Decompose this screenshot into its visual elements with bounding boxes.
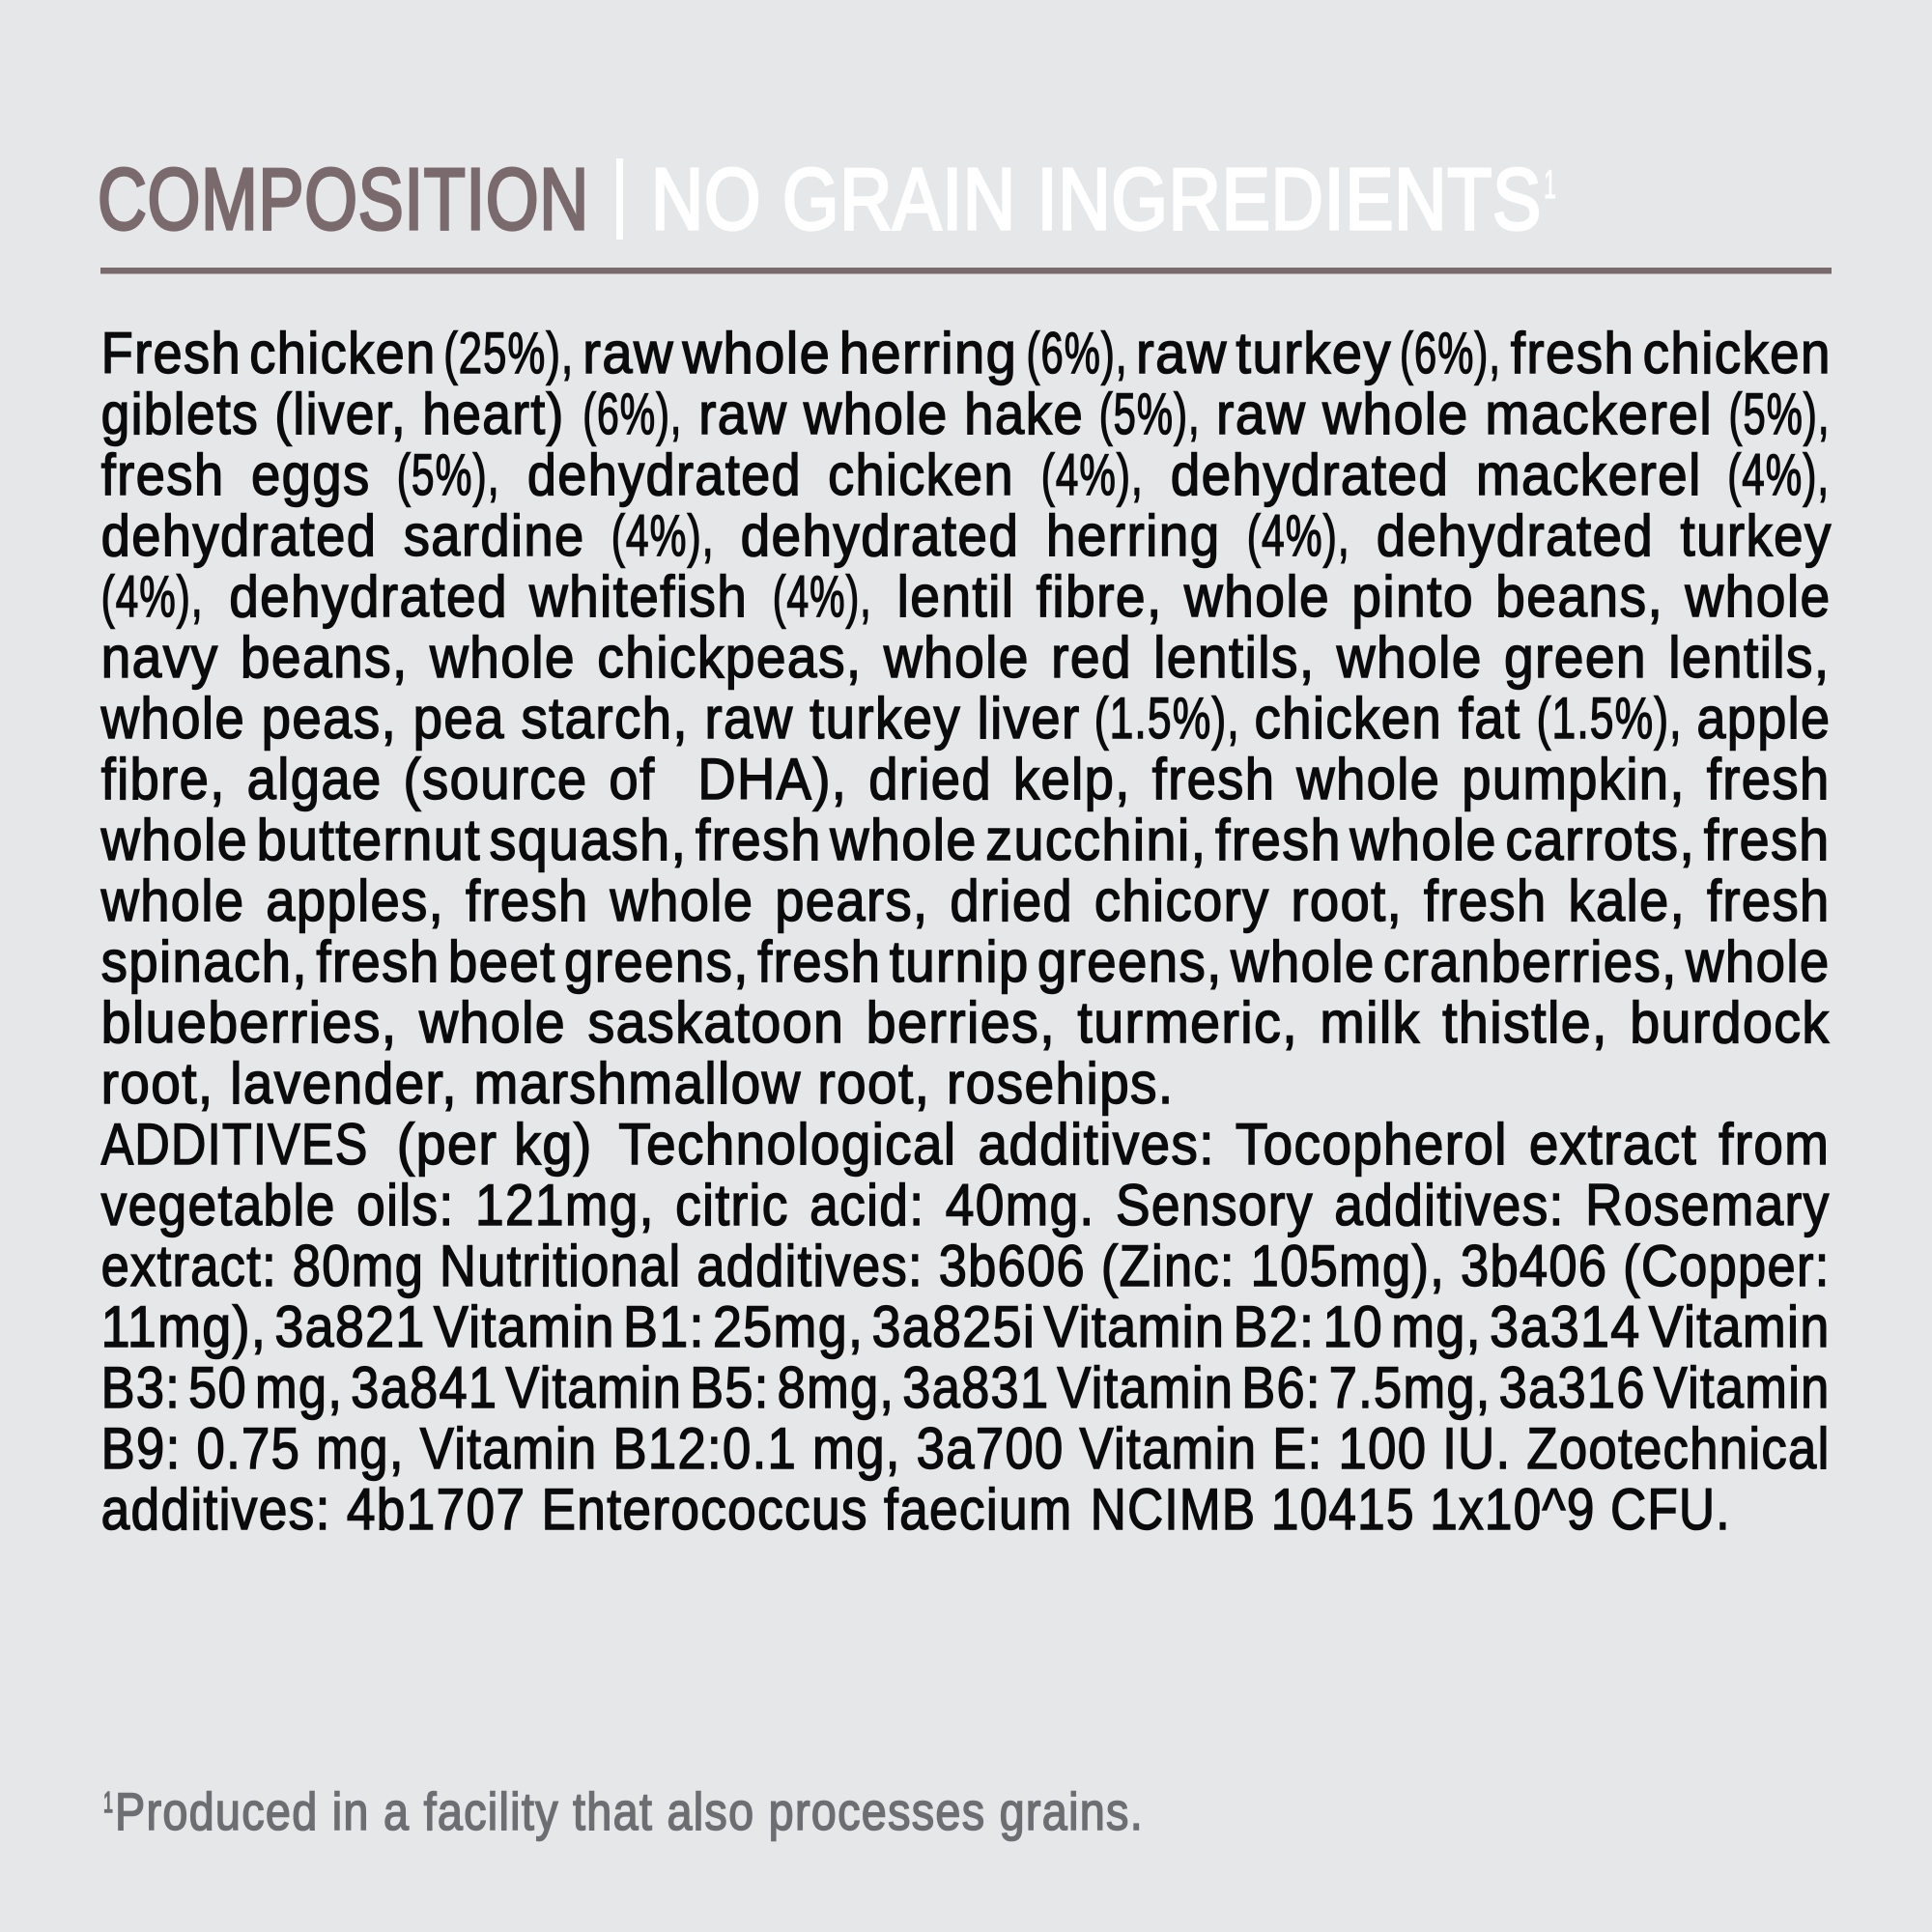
text block: ingredients list: dehydrated turkey [1377, 503, 1833, 568]
text block: ingredients list: raw whole herring [582, 321, 1017, 385]
text block: ingredients list: root, lavender, marshmallow root, rosehips. [101, 1051, 1175, 1116]
text block: ingredients list: dehydrated herring [741, 503, 1221, 568]
text block: additives list [101, 1112, 1831, 1542]
text block: ingredients list: (4%), [101, 564, 204, 629]
text block: ingredients list: (6%), [1026, 321, 1128, 385]
text block: ingredients list: whole butternut squash, fresh whole zucchini, fresh whole carrots, fresh [100, 808, 1831, 872]
footnote: Produced in a facility that also processes grains. [115, 1781, 1144, 1841]
heading divider [616, 158, 623, 240]
text block: ingredients list: (4%), [1041, 442, 1144, 507]
text block: ingredients list: (4%), [773, 564, 872, 629]
text block: ingredients list: (6%), [582, 382, 682, 446]
title: composition heading [98, 152, 1556, 248]
text block: ingredients list: chicken fat [1254, 686, 1520, 751]
text block: additives list: NCIMB 10415 1x10^9 CFU. [1091, 1477, 1731, 1542]
text block: additives list: (per kg) [397, 1112, 593, 1177]
text block: ingredients list [100, 321, 1833, 1116]
text block: ingredients list: lentil fibre, whole pinto beans, whole [897, 564, 1832, 629]
text block: ingredients list: dehydrated sardine [101, 503, 585, 568]
heading rule [100, 268, 1832, 274]
text block: ingredients list: (25%), [443, 321, 574, 385]
text block: ingredients list: fresh chicken [1511, 321, 1832, 385]
text block: additives list: additives: 4b1707 Enterococcus faecium [101, 1477, 1073, 1542]
text block: ingredients list: whole peas, pea starch, raw turkey liver [100, 686, 1081, 751]
text block: ingredients list: (1.5%), [1094, 686, 1240, 751]
heading: COMPOSITION: COMPOSITION [98, 152, 589, 248]
text block: ingredients list: (5%), [1729, 382, 1830, 446]
text block: ingredients list: navy beans, whole chickpeas, whole red lentils, whole green lentils, [101, 625, 1831, 690]
text block: ingredients list: (5%), [1099, 382, 1201, 446]
text block: ingredients list: (1.5%), [1537, 686, 1683, 751]
text block: ingredients list: dehydrated mackerel [1171, 442, 1702, 507]
heading: no grain ingredients: NO GRAIN INGREDIENTS [651, 152, 1542, 248]
text block: ingredients list: giblets (liver, heart) [101, 382, 565, 446]
text block: ingredients list: fresh eggs [101, 442, 371, 507]
text block: ingredients list: blueberries, whole saskatoon berries, turmeric, milk thistle, burdock [101, 990, 1831, 1055]
text block: ingredients list: dehydrated whitefish [229, 564, 748, 629]
text block: ingredients list: (6%), [1400, 321, 1501, 385]
text block: ingredients list: (5%), [397, 442, 500, 507]
text block: ingredients list: raw turkey [1136, 321, 1392, 385]
text block: ingredients list: (4%), [1247, 503, 1350, 568]
text block: additives list: ADDITIVES [101, 1112, 369, 1177]
text block: ingredients list: raw whole hake [698, 382, 1084, 446]
heading footnote mark: 1 [1544, 161, 1556, 207]
text block: ingredients list: dehydrated chicken [527, 442, 1014, 507]
text block: ingredients list: apple [1696, 686, 1831, 751]
text block: ingredients list: Fresh chicken [101, 321, 437, 385]
text block: ingredients list: (4%), [611, 503, 715, 568]
text block: additives list: Technological additives: Tocopherol extract from [618, 1112, 1830, 1177]
text block: ingredients list: raw whole mackerel [1216, 382, 1713, 446]
footnote: 1 [103, 1785, 113, 1819]
text block: ingredients list: (4%), [1727, 442, 1830, 507]
